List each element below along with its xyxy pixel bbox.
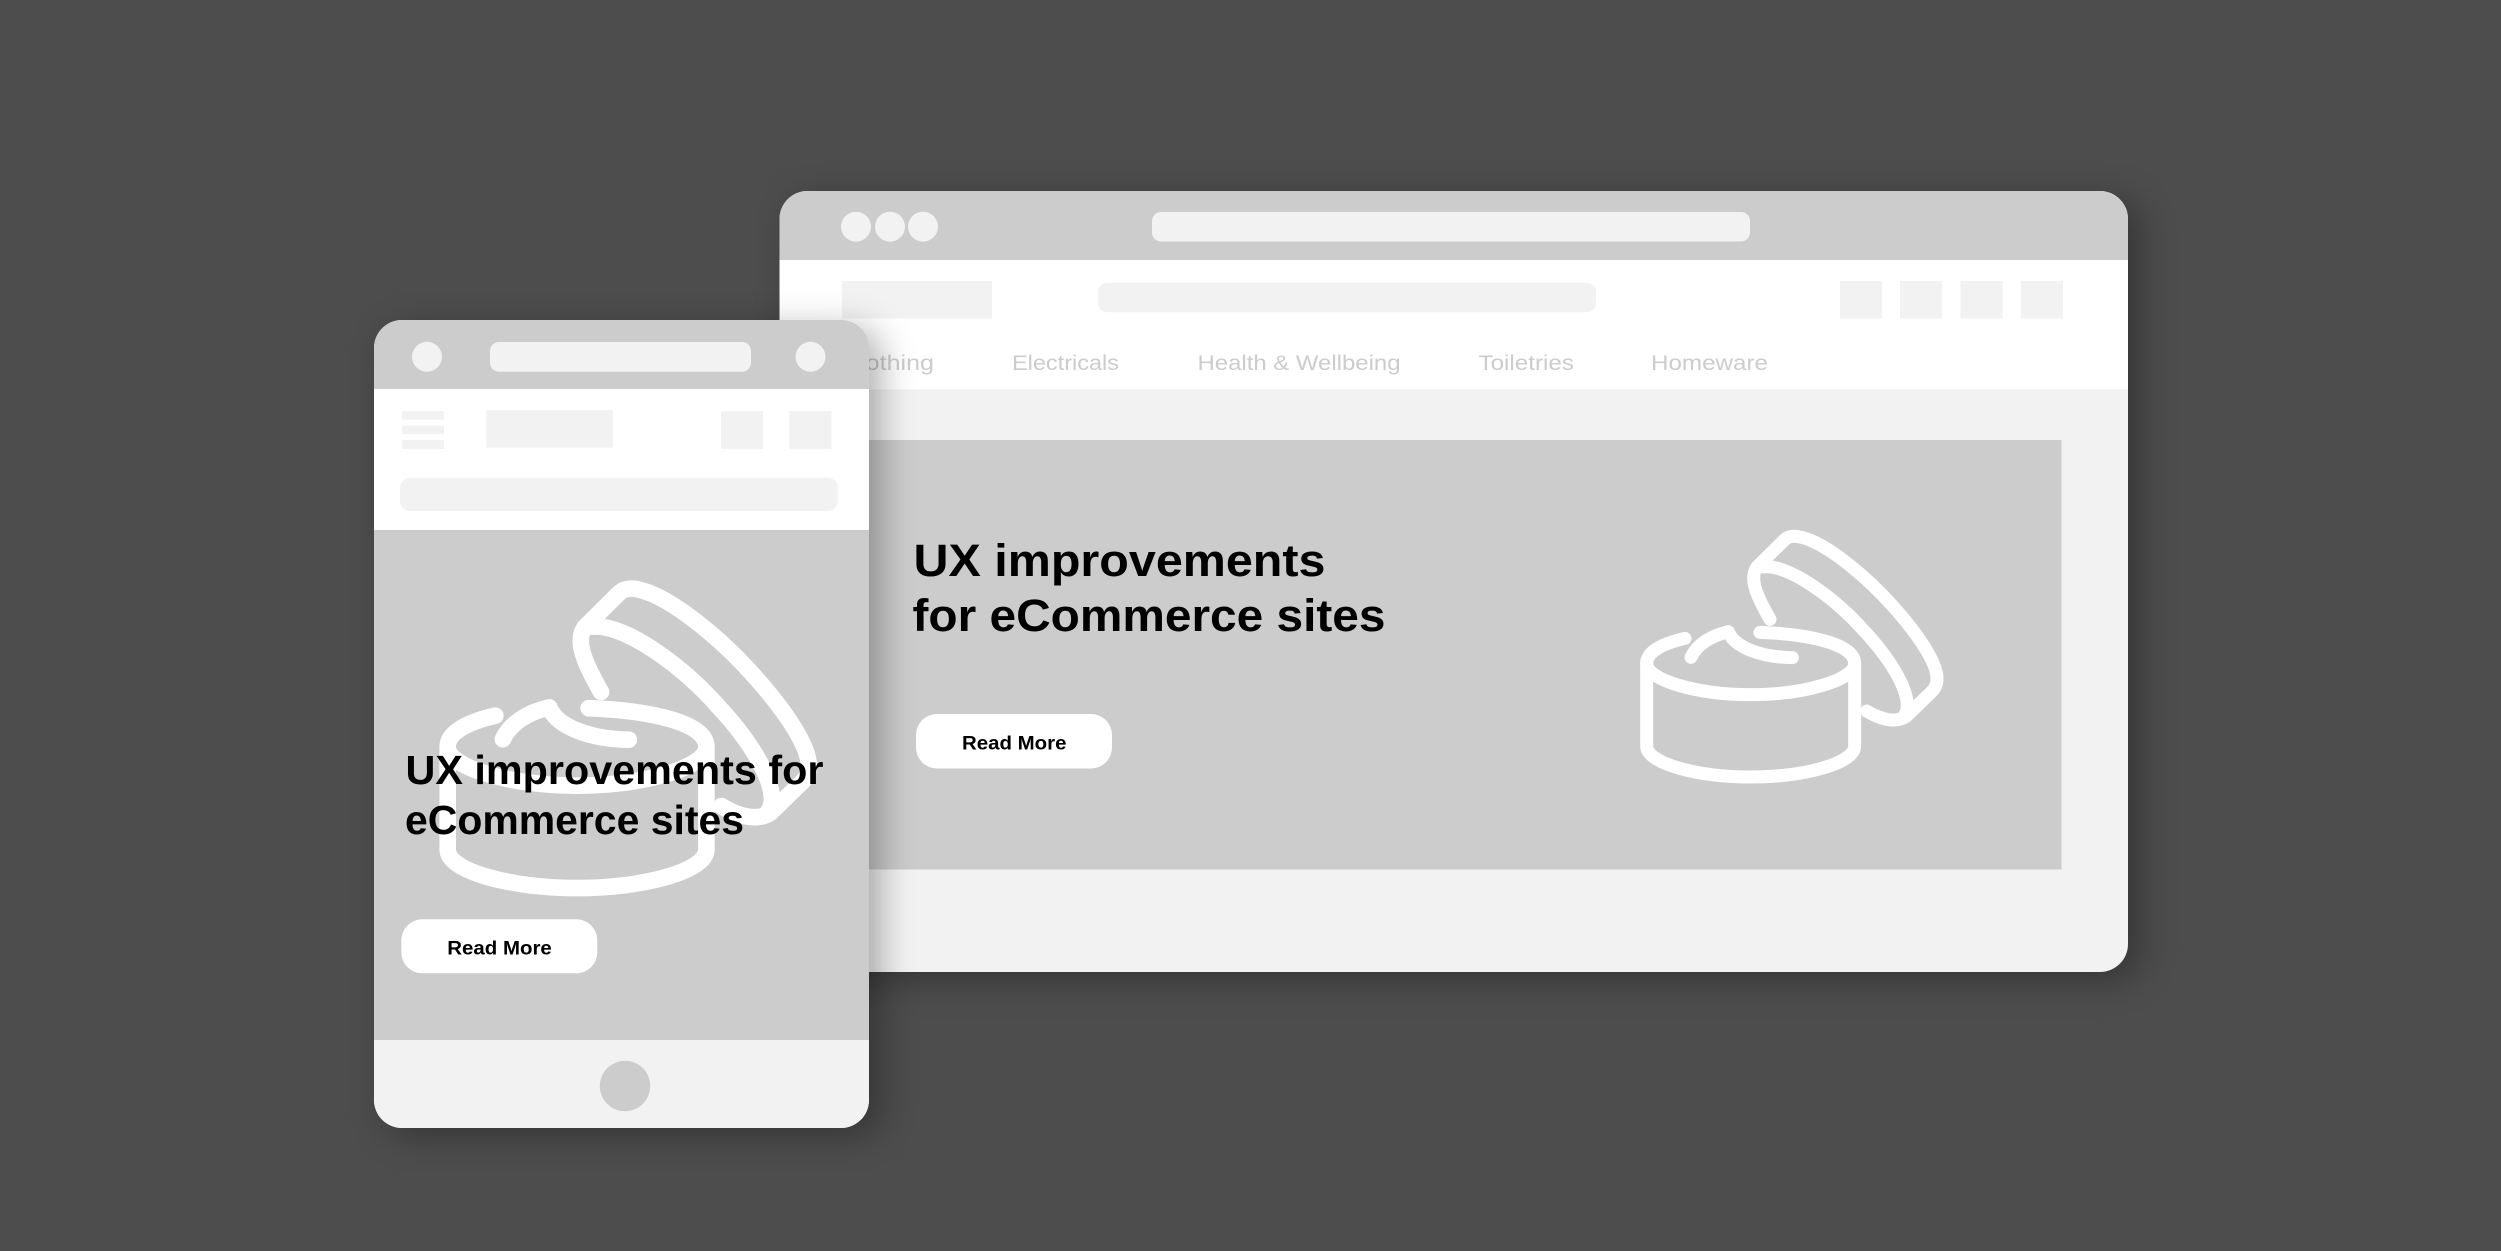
phone read more button <box>401 919 597 973</box>
phone logo placeholder <box>486 410 613 448</box>
hamburger menu icon <box>402 411 444 449</box>
phone body <box>374 320 869 1128</box>
navigation menu: Health & Wellbeing <box>1198 352 1400 375</box>
browser title bar <box>780 191 2128 260</box>
header icon placeholders <box>1840 281 2063 318</box>
panel: desktop browser window <box>780 191 2128 972</box>
hero banner <box>842 440 2062 870</box>
browser contents <box>780 191 2128 870</box>
phone icon placeholders <box>721 411 832 449</box>
phone hero <box>374 530 869 1040</box>
navigation menu: Homeware <box>1651 352 1768 375</box>
hero heading: UX improvements <box>914 535 1326 586</box>
phone heading <box>406 754 823 834</box>
site logo placeholder <box>842 281 992 318</box>
panel: mobile phone <box>374 320 869 1128</box>
phone address bar <box>490 342 751 372</box>
navigation menu: Electricals <box>1012 352 1119 375</box>
window control dots <box>841 212 938 242</box>
browser window body <box>780 191 2128 972</box>
icon: cream jar large <box>448 589 809 888</box>
phone heading: UX improvements for <box>406 747 824 793</box>
read more button <box>916 714 1112 768</box>
camera dots <box>412 342 826 372</box>
phone read more button: Read More <box>447 938 552 960</box>
phone top bar <box>374 320 869 389</box>
icon: cream jar <box>1647 536 1937 777</box>
read more button: Read More <box>962 734 1066 754</box>
site header <box>780 260 2128 390</box>
search bar <box>1098 283 1596 312</box>
navigation menu: Clothing <box>842 352 934 375</box>
hero heading: for eCommerce sites <box>912 590 1386 641</box>
navigation menu: Toiletries <box>1478 352 1574 375</box>
phone contents <box>374 320 869 1128</box>
phone bottom bar <box>374 1060 869 1128</box>
home button <box>600 1061 650 1111</box>
address bar <box>1152 212 1750 242</box>
phone heading: eCommerce sites <box>405 797 744 843</box>
phone site header <box>374 389 869 530</box>
hero heading <box>913 543 1384 632</box>
phone search bar <box>400 478 838 511</box>
navigation menu <box>869 354 1767 374</box>
